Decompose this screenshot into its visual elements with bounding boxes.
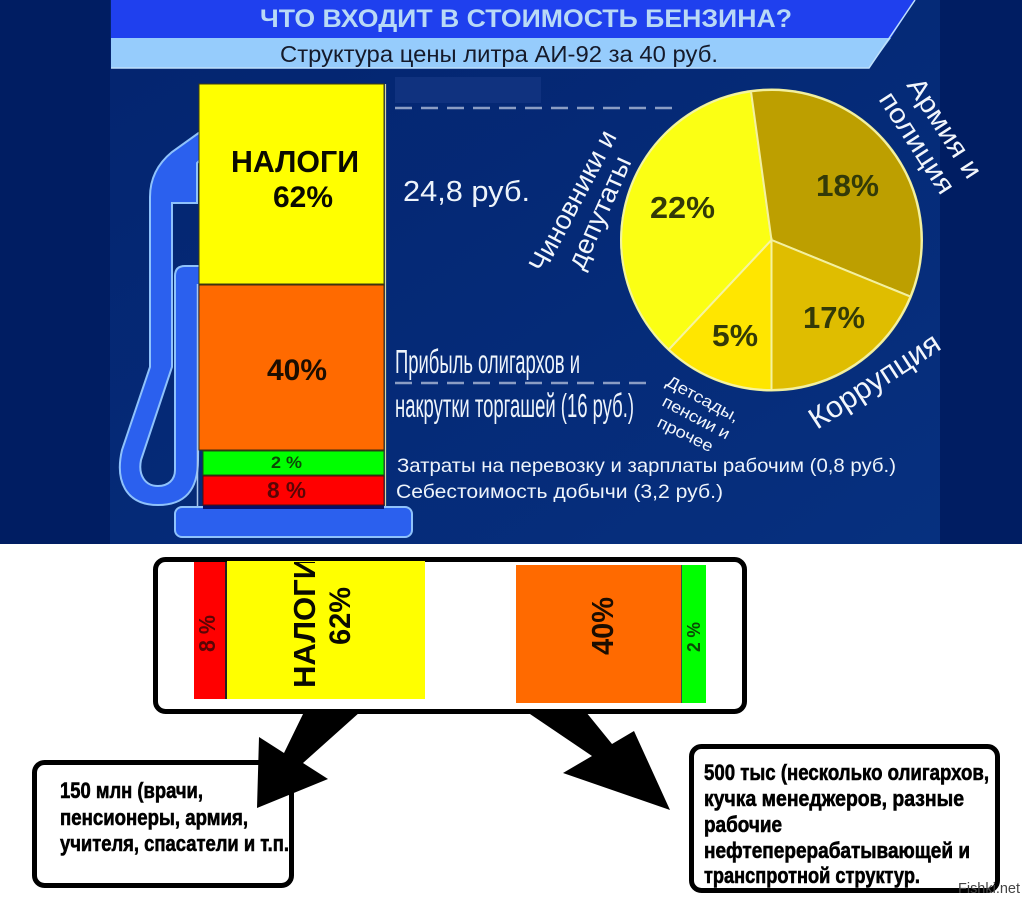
group: profit and transport: [516, 565, 706, 703]
label: kindergartens, pensions: пенсии и: [659, 393, 733, 443]
bar labels: [395, 176, 896, 503]
subtitle: Структура цены литра АИ-92 за 40 руб.: [280, 41, 718, 67]
label: oligarch profit: [395, 343, 634, 424]
label: officials: Чиновники и: [523, 125, 623, 277]
label: army and police: полиция: [873, 86, 961, 200]
label: kindergartens, pensions: прочее: [654, 413, 716, 456]
pie labels: [523, 72, 988, 456]
watermark: Fishki.net: [958, 880, 1021, 897]
panel: 150 million: пенсионеры, армия,: [60, 805, 248, 830]
panel: 150 million: [34, 762, 292, 886]
panel: rearranged shares: [156, 557, 744, 712]
label: oligarch profit: накрутки торгашей (16 руб.): [395, 387, 634, 424]
bar segment: transport 2%: [203, 451, 384, 475]
bar segment: transport 2%: 2 %: [271, 453, 302, 472]
panel: 500 thousand: рабочие: [704, 812, 782, 837]
group: taxes and extraction: 62%: [324, 587, 357, 645]
group: taxes and extraction: 8 %: [194, 615, 220, 652]
bar segment: taxes 62%: НАЛОГИ: [231, 144, 359, 179]
arrow: to 150 million: [257, 712, 360, 808]
bar segment: oligarch profit 40%: 40%: [267, 354, 327, 387]
arrow: to 500 thousand: [527, 712, 670, 810]
panel: 500 thousand: нефтеперерабатывающей и: [704, 838, 970, 863]
bar segment: oligarch profit 40%: [199, 285, 384, 450]
panel: 150 million: 150 млн (врачи,: [60, 778, 203, 803]
label: oligarch profit: Прибыль олигархов и: [395, 343, 580, 380]
panel: 500 thousand: кучка менеджеров, разные: [704, 786, 964, 811]
header banner: [111, 0, 915, 68]
pie chart: tax breakdown: [620, 88, 923, 392]
bar segment: extraction 8%: [203, 476, 384, 505]
panel: 500 thousand: транспротной структур.: [704, 863, 920, 888]
panel: 150 million: учителя, спасатели и т.п.: [60, 831, 289, 856]
label: kindergartens, pensions: Детсады,: [663, 373, 742, 426]
group: taxes and extraction: НАЛОГИ: [287, 557, 322, 688]
label: 24,8 rub: 24,8 руб.: [403, 176, 530, 208]
bar segment: extraction 8%: 8 %: [267, 477, 306, 503]
title: ЧТО ВХОДИТ В СТОИМОСТЬ БЕНЗИНА?: [260, 5, 792, 33]
label: corruption: Коррупция: [803, 326, 947, 436]
group: taxes and extraction: [194, 557, 425, 699]
label: army and police: Армия и: [901, 72, 988, 184]
background: dark blue poster area: [0, 0, 1022, 544]
panel: 500 thousand: [692, 746, 998, 890]
label: officials: депутаты: [561, 152, 637, 273]
label: army and police: [873, 72, 988, 200]
label: kindergartens, pensions: [654, 373, 742, 456]
pie slice: kindergartens 5%: [669, 240, 772, 390]
group: profit and transport: 40%: [585, 597, 620, 655]
bar segment: taxes 62%: 62%: [273, 181, 333, 214]
dashed guide lines: [395, 108, 672, 383]
bar segment: taxes 62%: [199, 84, 384, 284]
pie chart: tax breakdown: 5%: [712, 318, 758, 353]
pie chart: tax breakdown: 22%: [650, 190, 715, 225]
label: transport costs: Затраты на перевозку и зарплаты рабочим (0,8 руб.): [397, 455, 896, 477]
stacked bar: price structure: [199, 84, 384, 509]
pie chart: tax breakdown: 18%: [816, 168, 879, 203]
group: profit and transport: 2 %: [684, 622, 704, 652]
pie slice: army 18%: [751, 90, 921, 297]
label: extraction cost: Себестоимость добычи (3,2 руб.): [396, 481, 723, 503]
pie slice: officials 22%: [621, 91, 772, 350]
pie chart: tax breakdown: 17%: [803, 300, 865, 335]
icon: fuel pump hose and base: [120, 84, 412, 537]
pie slice: corruption 17%: [772, 240, 910, 390]
